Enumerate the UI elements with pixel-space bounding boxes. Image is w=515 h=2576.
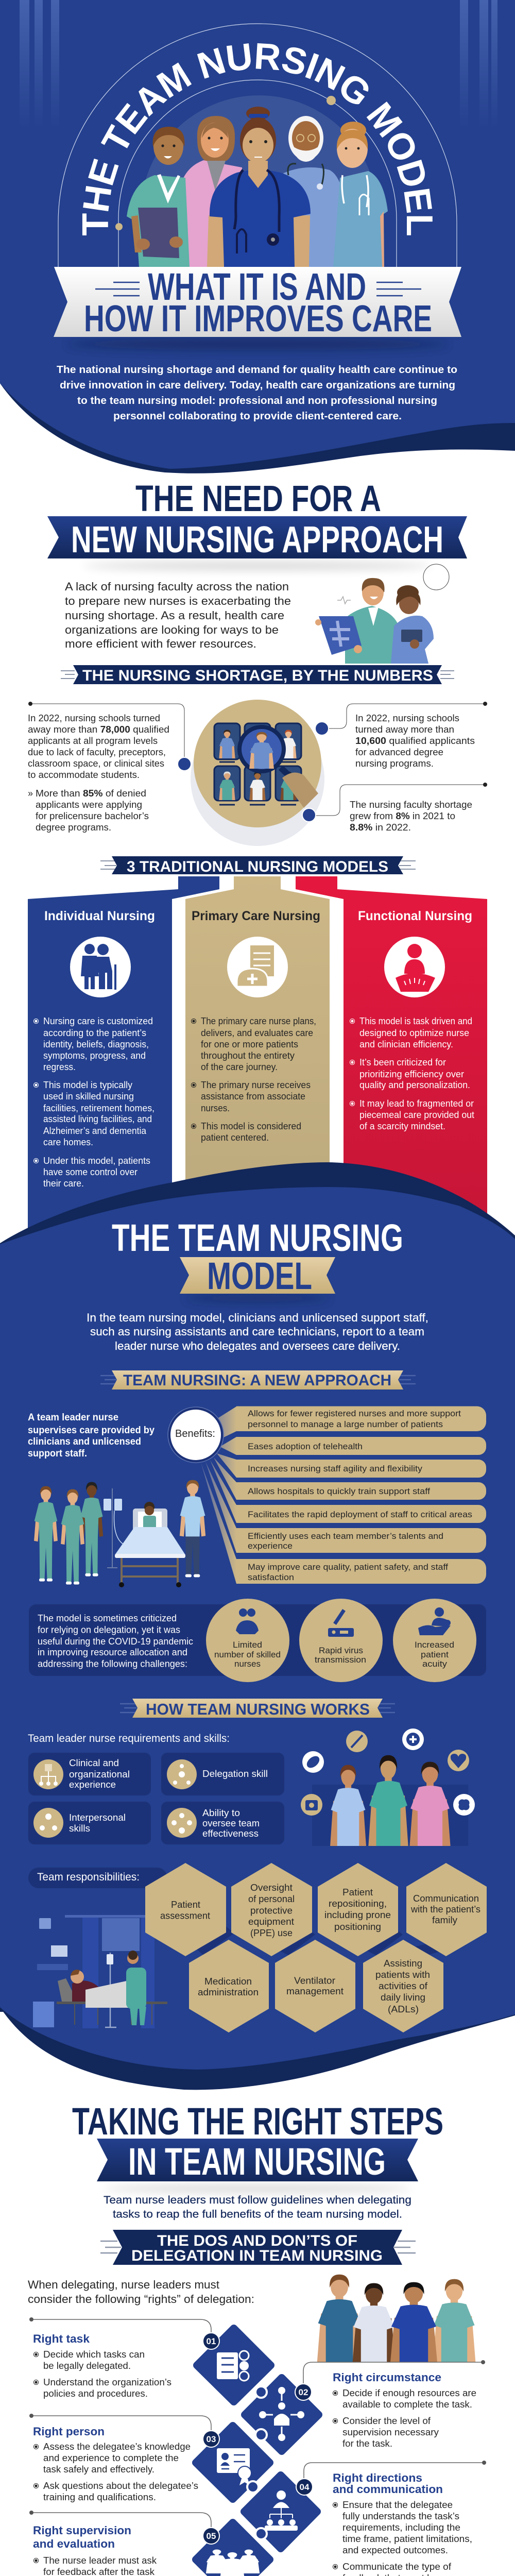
paragraph: leader nurse who delegates and oversees care delivery. xyxy=(115,1340,400,1352)
right 02: right circumstance: for the task. xyxy=(342,2438,392,2449)
heading: Functional Nursing xyxy=(358,909,472,923)
right 05: right supervision and evaluation: Right supervision xyxy=(33,2524,131,2537)
diamond 1: right task xyxy=(197,2328,271,2402)
callout: 78,000 applicants: degree programs. xyxy=(36,822,111,833)
team leader text xyxy=(28,1412,154,1459)
callout: 78,000 applicants: for prelicensure bachelor’s xyxy=(36,811,149,821)
bullets: designed to optimize nurse xyxy=(359,1028,469,1038)
banner: team nursing a new approach: TEAM NURSING: A NEW APPROACH xyxy=(123,1372,391,1389)
hexagon: ppe oversight: of personal xyxy=(248,1894,295,1904)
challenge: limited skilled nurses: number of skilled xyxy=(214,1650,281,1659)
bullets: The primary care nurse plans, xyxy=(201,1016,316,1026)
callout: 78,000 applicants: In 2022, nursing schools turned xyxy=(28,713,160,723)
benefit 5 xyxy=(236,1505,486,1523)
right 04: right directions and communication: requirements, including the xyxy=(342,2522,460,2533)
puzzle diamonds xyxy=(196,2328,319,2576)
benefit 6 xyxy=(236,1528,486,1553)
bullets xyxy=(33,1016,154,1189)
hexagon: family communication: Communication xyxy=(413,1893,479,1904)
nurse in pink coat xyxy=(178,116,245,267)
bullets: for one or more patients xyxy=(201,1039,298,1049)
hexagon: ppe oversight xyxy=(231,1863,312,1956)
right 01: right task: Understand the organization’s xyxy=(43,2377,171,2387)
rights intro xyxy=(28,2278,254,2306)
challenge: rapid virus transmission: Rapid virus xyxy=(319,1646,363,1655)
right 03: right person: Ask questions about the delegatee’s xyxy=(43,2481,198,2491)
right 01: right task: be legally delegated. xyxy=(43,2361,131,2371)
callout: 78,000 applicants xyxy=(28,702,191,833)
hexagon: ventilator management: Ventilator xyxy=(294,1975,335,1986)
bullets: of the care journey. xyxy=(201,1062,278,1072)
skill: clinical experience: Clinical and xyxy=(69,1758,119,1768)
rights intro: consider the following “rights” of delegation: xyxy=(28,2293,254,2306)
right 04: right directions and communication: Communicate the type of xyxy=(342,2562,452,2572)
callout: 78,000 applicants: to accommodate students. xyxy=(28,770,140,780)
bullets: It may lead to fragmented or xyxy=(359,1098,474,1109)
section: the team nursing model xyxy=(0,1162,515,2090)
benefit 1: Allows for fewer registered nurses and more support xyxy=(248,1409,461,1418)
hexagon: patient repositioning: positioning xyxy=(334,1922,381,1932)
skill: oversee team xyxy=(161,1802,284,1844)
right 03: right person: Right person xyxy=(33,2425,105,2438)
hexagon: medication administration xyxy=(189,1940,269,2032)
callout: 78,000 applicants: applicants at all program levels xyxy=(28,736,158,746)
right 03: right person: task safely and effectively. xyxy=(43,2464,154,2475)
hexagon: assisting with adls: Assisting xyxy=(384,1958,422,1969)
icon: clipboard and nurse cap xyxy=(227,937,288,997)
right 02: right circumstance: Decide if enough resources are xyxy=(342,2388,476,2398)
right 01: right task: Decide which tasks can xyxy=(43,2349,145,2360)
banner: the nursing shortage, by the numbers: THE NURSING SHORTAGE, BY THE NUMBERS xyxy=(82,667,433,684)
hexagon: assisting with adls: patients with xyxy=(375,1970,430,1980)
magnifier xyxy=(239,727,318,808)
challenge: increased patient acuity: Increased xyxy=(415,1640,454,1650)
hexagon: ventilator management: management xyxy=(286,1986,344,1996)
illustration: care team at bedside xyxy=(34,1480,205,1587)
skill: delegation: Delegation skill xyxy=(202,1769,268,1779)
hexagon: family communication xyxy=(406,1863,487,1956)
callout: faculty shortage: 8.8% in 2022. xyxy=(350,822,411,833)
bullets: facilities, retirement homes, xyxy=(43,1103,154,1113)
icon: nurse and elderly patient xyxy=(70,937,131,997)
right 02: right circumstance: available to complete the task. xyxy=(342,2399,472,2410)
right 04: right directions and communication: Ensure that the delegatee xyxy=(342,2500,453,2510)
hexagon: ppe oversight: Oversight xyxy=(250,1883,293,1893)
hexagon: medication administration: Medication xyxy=(204,1976,252,1987)
critique text: useful during the COVID-19 pandemic xyxy=(38,1636,193,1647)
hexagon: patient repositioning: Patient xyxy=(342,1887,373,1897)
team leader text: support staff. xyxy=(28,1448,87,1459)
bullets: delivers, and evaluates care xyxy=(201,1028,313,1038)
section: the need for a new nursing approach xyxy=(28,479,487,846)
banner: how team nursing works: HOW TEAM NURSING WORKS xyxy=(146,1700,370,1718)
diamond 5: right supervision xyxy=(196,2522,270,2576)
challenge: rapid virus transmission: transmission xyxy=(315,1655,366,1665)
illustration: four clinicians xyxy=(317,2275,475,2362)
right 05: right supervision and evaluation: 05 xyxy=(207,2531,216,2541)
paragraph: nursing shortage. As a result, health care xyxy=(65,609,284,622)
right 01: right task: 01 xyxy=(207,2336,216,2346)
column: functional nursing xyxy=(296,876,487,1247)
right 04: right directions and communication: Right directions xyxy=(333,2471,422,2484)
bullets: quality and personalization. xyxy=(359,1080,470,1090)
right 04: right directions and communication: fully understands the task’s xyxy=(342,2511,459,2521)
critique text: in improving resource allocation and xyxy=(38,1647,187,1657)
hexagon: assisting with adls: activities of xyxy=(379,1981,428,1991)
banner: 3 TRADITIONAL NURSING MODELS xyxy=(127,858,388,875)
right 03: right person: and experience to complete the xyxy=(43,2453,179,2463)
callout: 10,600 applicants xyxy=(315,702,487,769)
right 01: right task: Right task xyxy=(33,2332,90,2345)
callout: faculty shortage: The nursing faculty shortage xyxy=(350,800,472,810)
critique text xyxy=(38,1613,193,1669)
puzzle knobs xyxy=(247,2386,267,2539)
bullets: of a scarcity mindset. xyxy=(359,1121,445,1131)
right 04: right directions and communication: time frame, patient limitations, xyxy=(342,2534,472,2544)
right 03: right person: Assess the delegatee’s knowledge xyxy=(43,2442,191,2452)
skill: delegation xyxy=(161,1753,284,1795)
callout: 10,600 applicants: 10,600 qualified applicants xyxy=(355,736,475,746)
right 02: right circumstance: supervision necessary xyxy=(342,2427,439,2437)
bullets: patient centered. xyxy=(201,1132,269,1143)
right 03: right person xyxy=(29,2414,219,2502)
callout: 78,000 applicants: away more than 78,000 qualified xyxy=(28,724,169,735)
paragraph: tasks to reap the full benefits of the team nursing model. xyxy=(113,2208,402,2221)
benefit 2: Eases adoption of telehealth xyxy=(248,1442,363,1451)
hexagon: patient assessment: assessment xyxy=(160,1910,210,1921)
decorative arches xyxy=(58,24,457,267)
callout: 78,000 applicants: due to lack of faculty, preceptors, xyxy=(28,747,166,757)
hexagon: ventilator management xyxy=(275,1940,355,2032)
right 02: right circumstance xyxy=(295,2360,485,2449)
skill: oversee team: oversee team xyxy=(202,1818,260,1828)
benefits circle: Benefits: xyxy=(175,1428,215,1439)
bullets: used in skilled nursing xyxy=(43,1091,134,1101)
illustration: three nurses with medical icons xyxy=(301,1728,475,1846)
nurse older man xyxy=(278,116,345,267)
challenge: increased patient acuity: acuity xyxy=(422,1659,448,1669)
heading: Individual Nursing xyxy=(44,909,155,923)
bullets: This model is task driven and xyxy=(359,1016,472,1026)
banner: what it is and how it improves care: WHAT IT IS AND xyxy=(148,265,366,308)
skill: clinical experience xyxy=(28,1753,151,1795)
bullets xyxy=(350,1016,474,1131)
challenge: limited skilled nurses xyxy=(206,1599,289,1682)
hexagon: assisting with adls: (ADLs) xyxy=(388,2004,419,2014)
heading: MODEL xyxy=(207,1255,312,1297)
hexagon: medication administration: administration xyxy=(198,1987,259,1997)
intro text: to the team nursing model: professional and non professional nursing xyxy=(77,395,437,406)
hexagon: patient repositioning: repositioning, xyxy=(329,1899,387,1909)
skill: interpersonal: skills xyxy=(69,1823,90,1834)
heading xyxy=(72,2100,443,2193)
skill: oversee team: effectiveness xyxy=(202,1828,259,1839)
banner: dos and don'ts xyxy=(100,2230,416,2265)
paragraph: to prepare new nurses is exacerbating the xyxy=(65,595,291,607)
bullets: have some control over xyxy=(43,1167,138,1177)
bullets: care homes. xyxy=(43,1137,93,1147)
column: primary care nursing xyxy=(185,876,330,1247)
bullets: throughout the entirety xyxy=(201,1050,295,1061)
paragraph: Team nurse leaders must follow guidelines when delegating xyxy=(104,2194,411,2206)
benefit 6: Efficiently uses each team member’s talents and xyxy=(248,1531,443,1541)
team leader text: clinicians and unlicensed xyxy=(28,1436,141,1447)
bullets: This model is considered xyxy=(201,1121,301,1131)
benefit 7 xyxy=(236,1559,486,1584)
right 02: right circumstance: 02 xyxy=(299,2387,308,2397)
callout: 10,600 applicants: turned away more than xyxy=(355,724,454,735)
paragraph: organizations are looking for ways to be xyxy=(65,623,279,636)
hexagon: family communication: family xyxy=(432,1915,457,1925)
skill: interpersonal xyxy=(28,1802,151,1844)
callout: 78,000 applicants: » xyxy=(28,788,33,799)
skill: interpersonal: Interpersonal xyxy=(69,1812,126,1823)
paragraph xyxy=(87,1311,428,1352)
bullets: Alzheimer’s and dementia xyxy=(43,1126,147,1136)
benefits circle xyxy=(168,1407,224,1463)
heading xyxy=(112,1216,403,1302)
intro text: The national nursing shortage and demand for quality health care continue to xyxy=(57,364,457,376)
title: arched: THE TEAM NURSING MODEL xyxy=(82,43,433,235)
hexagon: family communication: with the patient’s xyxy=(410,1904,480,1914)
right 01: right task xyxy=(29,2317,219,2399)
right 04: right directions and communication xyxy=(296,2461,486,2576)
bullets: piecemeal care provided out xyxy=(359,1110,474,1120)
hero section xyxy=(0,0,515,473)
heading xyxy=(47,479,467,570)
heading: Primary Care Nursing xyxy=(192,909,320,923)
intro text: drive innovation in care delivery. Today, health care organizations are turning xyxy=(60,380,455,391)
skill: oversee team: Ability to xyxy=(202,1808,240,1818)
bullets: identity, beliefs, diagnosis, xyxy=(43,1039,149,1049)
bullets: The primary nurse receives xyxy=(201,1080,311,1090)
section: taking the right steps xyxy=(28,2100,487,2576)
diamond 3: right person xyxy=(196,2426,270,2499)
critique text: addressing the following challenges: xyxy=(38,1659,187,1669)
center graphic: nurse candidates under magnifier xyxy=(191,700,324,846)
rights intro: When delegating, nurse leaders must xyxy=(28,2278,219,2291)
team responsibilities pill: Team responsibilities: xyxy=(37,1871,140,1883)
callout: faculty shortage xyxy=(302,783,487,833)
right 05: right supervision and evaluation: and evaluation xyxy=(33,2537,115,2550)
benefit 1: personnel to manage a large number of patients xyxy=(248,1419,443,1429)
hexagon: patient assessment xyxy=(145,1863,226,1956)
diamond 4: right directions xyxy=(244,2475,317,2549)
panel: covid challenges xyxy=(29,1599,486,1682)
benefit 3 xyxy=(236,1460,486,1478)
bullets: and clinician efficiency. xyxy=(359,1039,453,1049)
lead nurse in navy scrubs xyxy=(207,107,311,267)
right 04: right directions and communication: and expected outcomes. xyxy=(342,2545,448,2555)
banner: dos and don'ts: THE DOS AND DON’TS OF xyxy=(157,2232,357,2249)
benefit 7: satisfaction xyxy=(248,1572,294,1582)
hexagon: ppe oversight: protective xyxy=(250,1905,293,1916)
challenge: rapid virus transmission xyxy=(299,1599,383,1682)
heading: THE NEED FOR A xyxy=(135,479,381,519)
callout: 78,000 applicants: classroom space, or clinical sites xyxy=(28,758,164,769)
connector shadows xyxy=(195,1927,453,1955)
benefit 4: Allows hospitals to quickly train support staff xyxy=(248,1486,430,1496)
callout: 10,600 applicants: In 2022, nursing schools xyxy=(355,713,459,723)
section: 3 traditional nursing models xyxy=(28,856,487,1257)
paragraph: A lack of nursing faculty across the nation xyxy=(65,580,289,593)
candidate cards xyxy=(214,723,301,805)
right 04: right directions and communication: and communication xyxy=(333,2483,443,2496)
bullets: symptoms, progress, and xyxy=(43,1050,146,1061)
bullets: This model is typically xyxy=(43,1080,132,1090)
right 03: right person: training and qualifications. xyxy=(43,2492,156,2502)
callout: 10,600 applicants: for advanced degree xyxy=(355,747,443,757)
nurse with clipboard xyxy=(127,127,190,267)
right 05: right supervision and evaluation: The nurse leader must ask xyxy=(43,2555,157,2566)
hexagon: patient repositioning xyxy=(318,1863,398,1956)
skill: clinical experience: organizational xyxy=(69,1769,130,1780)
heading: THE TEAM NURSING xyxy=(112,1216,403,1259)
hexagon: patient assessment: Patient xyxy=(171,1900,200,1910)
illustration: five nurses xyxy=(127,107,388,267)
responsibility hexagons xyxy=(145,1863,487,2032)
right 05: right supervision and evaluation xyxy=(29,2511,219,2576)
bullets: assisted living facilities, and xyxy=(43,1114,152,1124)
skill: clinical experience: experience xyxy=(69,1780,116,1790)
bullets: It’s been criticized for xyxy=(359,1057,446,1067)
benefit 5: Facilitates the rapid deployment of staff to critical areas xyxy=(248,1510,472,1519)
callout: faculty shortage: grew from 8% in 2021 to xyxy=(350,811,455,821)
paragraph xyxy=(65,580,291,650)
paragraph xyxy=(104,2194,411,2221)
banner: dos and don'ts: DELEGATION IN TEAM NURSING xyxy=(131,2247,383,2264)
team leader text: A team leader nurse xyxy=(28,1412,118,1423)
critique text: for relying on delegation, yet it was xyxy=(38,1625,180,1635)
right 02: right circumstance: Consider the level of xyxy=(342,2416,431,2426)
bullets: Under this model, patients xyxy=(43,1156,150,1166)
benefit 3: Increases nursing staff agility and flexibility xyxy=(248,1464,423,1473)
diamond 2: right circumstance xyxy=(245,2378,319,2451)
hexagon: patient repositioning: including prone xyxy=(324,1910,391,1920)
illustration: patient room xyxy=(33,1915,167,2028)
paragraph: more efficient with fewer resources. xyxy=(65,637,256,650)
column: individual nursing xyxy=(28,876,219,1257)
icon: nurse and gauge xyxy=(384,937,445,997)
benefits fan xyxy=(168,1406,486,1584)
callout: 78,000 applicants: applicants were applying xyxy=(36,800,142,810)
skills heading: Team leader nurse requirements and skills: xyxy=(28,1733,230,1744)
callout: 78,000 applicants: More than 85% of denied xyxy=(36,788,146,799)
banner: what it is and how it improves care xyxy=(54,265,461,350)
critique text: The model is sometimes criticized xyxy=(38,1613,177,1623)
right 02: right circumstance: Right circumstance xyxy=(333,2371,441,2384)
bullets: regress. xyxy=(43,1062,76,1072)
right 03: right person: 03 xyxy=(207,2434,216,2444)
challenge: limited skilled nurses: Limited xyxy=(233,1640,262,1650)
benefit 4 xyxy=(236,1482,486,1500)
callout: 10,600 applicants: nursing programs. xyxy=(355,758,434,769)
bullets xyxy=(191,1016,316,1143)
challenge: increased patient acuity: patient xyxy=(421,1650,449,1659)
right 01: right task: policies and procedures. xyxy=(43,2388,148,2399)
wedges xyxy=(201,1406,236,1584)
paragraph: In the team nursing model, clinicians and unlicensed support staff, xyxy=(87,1311,428,1324)
hexagon: assisting with adls xyxy=(363,1940,443,2032)
benefit 1 xyxy=(236,1406,486,1431)
benefit 6: experience xyxy=(248,1541,293,1551)
benefit 7: May improve care quality, patient safety, and staff xyxy=(248,1562,448,1572)
intro text xyxy=(57,364,457,422)
hexagon: ppe oversight: (PPE) use xyxy=(250,1928,293,1938)
heading: IN TEAM NURSING xyxy=(128,2140,386,2183)
team responsibilities pill xyxy=(28,1868,167,1888)
challenge: limited skilled nurses: nurses xyxy=(234,1659,261,1669)
bullets: prioritizing efficiency over xyxy=(359,1069,464,1079)
challenge: increased patient acuity xyxy=(393,1599,476,1682)
hexagon: ppe oversight: equipment xyxy=(248,1917,294,1927)
team leader text: supervises care provided by xyxy=(28,1425,154,1436)
bullets: Nursing care is customized xyxy=(43,1016,153,1026)
paragraph: such as nursing assistants and care technicians, report to a team xyxy=(90,1325,424,1338)
bullets: according to the patient’s xyxy=(43,1028,146,1038)
bullets: their care. xyxy=(43,1178,84,1189)
hexagon: assisting with adls: daily living xyxy=(381,1992,425,2003)
benefit 2 xyxy=(236,1437,486,1455)
bullets: nurses. xyxy=(201,1103,230,1113)
illustration: two clinicians with x-ray xyxy=(315,564,449,664)
right 04: right directions and communication: 04 xyxy=(300,2482,310,2492)
intro text: personnel collaborating to provide client-centered care. xyxy=(113,411,402,422)
bullets: assistance from associate xyxy=(201,1091,305,1101)
nurse in light blue xyxy=(333,122,388,267)
